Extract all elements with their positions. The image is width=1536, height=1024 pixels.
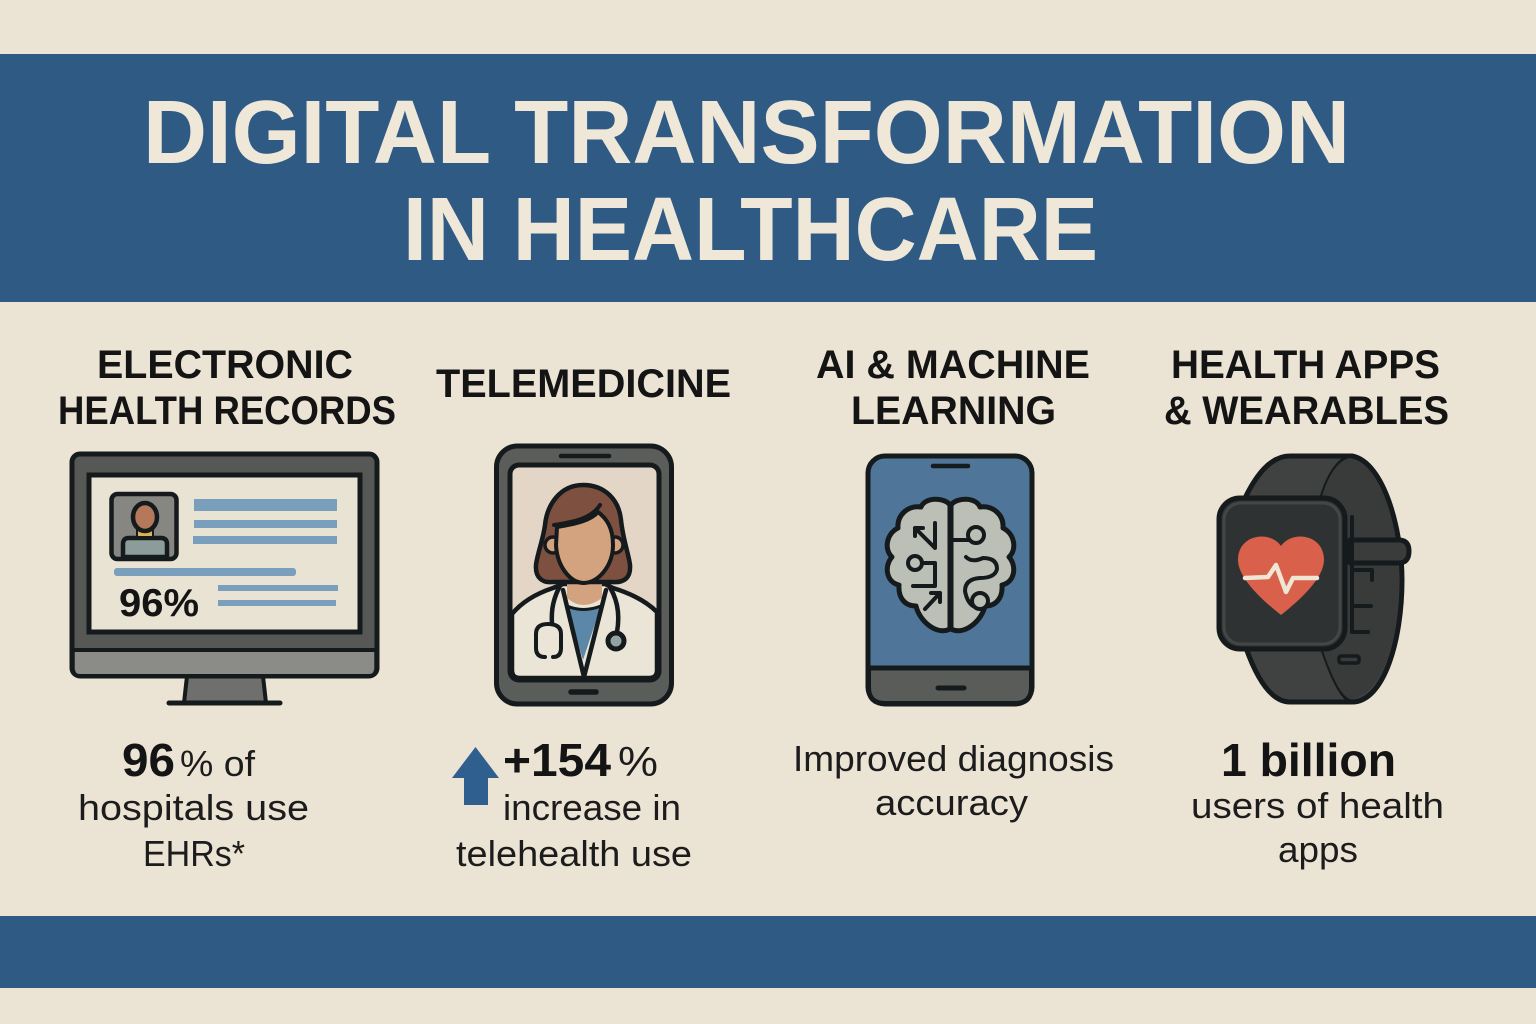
- heading: AI and machine learning: AI & MACHINE: [816, 343, 1090, 387]
- heading: AI and machine learning: LEARNING: [851, 389, 1056, 433]
- icon: smartphone with brain: [868, 456, 1032, 704]
- stat: 96% of hospitals use EHRs: [78, 734, 309, 874]
- icon: tablet with doctor: [496, 446, 672, 704]
- stat: 1 billion users of health apps: users of health: [1191, 785, 1444, 826]
- title: [143, 83, 1350, 280]
- panel: health apps and wearables: [1164, 343, 1449, 870]
- heading: health apps and wearables: [1164, 343, 1449, 433]
- stat: 96% of hospitals use EHRs: 96: [122, 734, 175, 786]
- heading: health apps and wearables: & WEARABLES: [1164, 389, 1449, 433]
- stat: improved diagnosis accuracy: accuracy: [875, 782, 1028, 823]
- panel: telemedicine: [436, 362, 731, 874]
- stat: +154% increase in telehealth use: %: [618, 738, 658, 785]
- stat: 96% of hospitals use EHRs: hospitals use: [78, 787, 309, 828]
- icon: desktop monitor with patient record: 96%: [119, 582, 199, 625]
- heading: AI and machine learning: [816, 343, 1090, 433]
- stat: 96% of hospitals use EHRs: EHRs*: [143, 833, 245, 874]
- heading: electronic health records: ELECTRONIC: [97, 343, 353, 387]
- heading: telemedicine: TELEMEDICINE: [436, 362, 731, 406]
- footer band: [0, 916, 1536, 988]
- icon: desktop monitor with patient record: [72, 454, 377, 703]
- panel: AI and machine learning: [793, 343, 1114, 823]
- heading: electronic health records: [58, 343, 396, 433]
- stat: 1 billion users of health apps: 1 billion: [1221, 734, 1396, 786]
- title: DIGITAL TRANSFORMATION: [143, 83, 1350, 183]
- stat: improved diagnosis accuracy: Improved diagnosis: [793, 738, 1114, 779]
- stat: 96% of hospitals use EHRs: % of: [180, 743, 256, 784]
- stat: 1 billion users of health apps: [1191, 734, 1444, 870]
- heading: electronic health records: HEALTH RECORDS: [58, 389, 396, 433]
- stat: +154% increase in telehealth use: [456, 734, 692, 874]
- heading: health apps and wearables: HEALTH APPS: [1171, 343, 1440, 387]
- stat: +154% increase in telehealth use: telehealth use: [456, 833, 692, 874]
- stat: +154% increase in telehealth use: increase in: [503, 787, 681, 828]
- header band: [0, 54, 1536, 302]
- icon: smartwatch with heart: [1219, 456, 1409, 702]
- panel: electronic health records: [58, 343, 396, 874]
- title: IN HEALTHCARE: [403, 180, 1098, 280]
- stat: 1 billion users of health apps: apps: [1278, 829, 1358, 870]
- icon: up arrow: [452, 747, 499, 805]
- stat: improved diagnosis accuracy: [793, 738, 1114, 823]
- stat: +154% increase in telehealth use: +154: [503, 734, 611, 786]
